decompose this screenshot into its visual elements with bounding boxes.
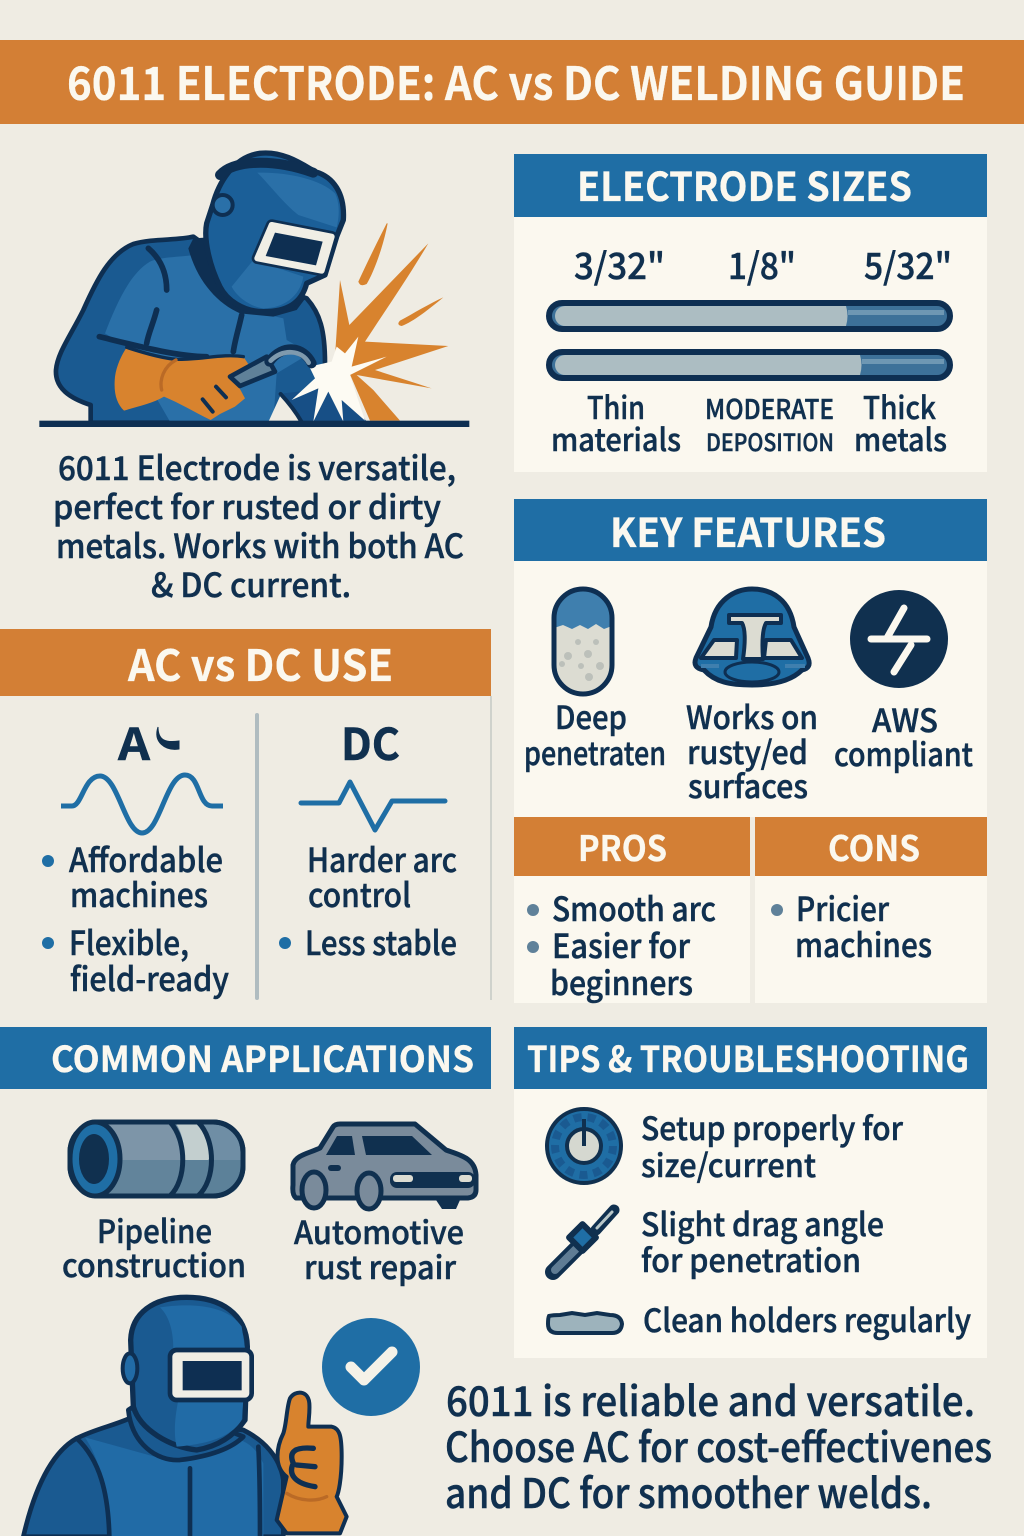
conclusion text: 6011 is reliable and versatile. xyxy=(446,1368,975,1428)
tips text: for penetration xyxy=(641,1236,861,1282)
icon: pipeline xyxy=(70,1122,243,1196)
panel: key features xyxy=(514,499,987,817)
heading: AC vs DC use xyxy=(0,629,491,696)
DC list: Less stable xyxy=(305,917,457,965)
intro text: & DC current. xyxy=(151,559,351,607)
cons list: Pricier xyxy=(796,883,889,931)
work surface xyxy=(39,421,469,427)
heading: cons: CONS xyxy=(828,821,920,872)
heading: pros xyxy=(514,817,750,876)
welder body xyxy=(56,237,325,423)
size uses: metals xyxy=(854,415,947,460)
heading: common applications: COMMON APPLICATIONS xyxy=(51,1031,474,1083)
AC list: Affordable xyxy=(69,834,223,882)
icon: deep penetration capsule xyxy=(554,589,612,694)
heading: pros: PROS xyxy=(578,821,667,872)
feature labels: rusty/ed xyxy=(687,728,808,774)
DC column: DC xyxy=(341,709,400,773)
thumbs up glove xyxy=(277,1393,347,1533)
tips text: Clean holders regularly xyxy=(643,1296,971,1342)
panel: pros xyxy=(514,817,750,1005)
size uses: Thin xyxy=(587,383,645,428)
feature labels: compliant xyxy=(834,730,973,776)
size uses: Thick xyxy=(863,383,936,428)
DC list xyxy=(279,834,457,965)
heading: key features xyxy=(514,499,987,561)
feature labels: Deep xyxy=(555,693,627,739)
icon: car xyxy=(293,1124,476,1209)
pros list: Smooth arc xyxy=(552,883,716,931)
size labels xyxy=(574,238,952,290)
glove xyxy=(115,347,250,420)
heading: electrode sizes: ELECTRODE SIZES xyxy=(577,155,912,213)
DC column xyxy=(279,709,457,965)
application labels: Automotive xyxy=(294,1208,464,1254)
electrode bar 2 xyxy=(549,352,950,378)
AC column: A xyxy=(117,709,151,773)
icon: AWS compliant bolt xyxy=(850,590,948,688)
icon: dial xyxy=(547,1109,621,1183)
lower body behind the flash xyxy=(283,387,367,422)
panel: electrode sizes xyxy=(514,154,987,472)
size labels: 1/8" xyxy=(728,238,796,290)
conclusion text xyxy=(445,1368,992,1520)
illustration: welder at work xyxy=(39,153,469,427)
DC list: control xyxy=(308,869,411,917)
size uses: materials xyxy=(551,415,681,460)
arc flash xyxy=(292,337,387,422)
size labels: 5/32" xyxy=(864,238,952,290)
torch xyxy=(230,357,275,386)
heading: AC vs DC use: AC vs DC USE xyxy=(127,632,393,694)
tips text xyxy=(641,1104,971,1342)
panel: common applications xyxy=(0,1027,491,1289)
conclusion text: and DC for smoother welds. xyxy=(445,1460,932,1520)
feature labels xyxy=(524,693,973,808)
cons list: machines xyxy=(795,919,932,967)
DC list: Harder arc xyxy=(307,834,457,882)
welding helmet xyxy=(206,153,343,312)
icon: check badge xyxy=(322,1318,420,1416)
DC waveform xyxy=(301,782,445,830)
feature labels: AWS xyxy=(872,696,938,742)
feature labels: penetraten xyxy=(524,729,666,775)
tips text: size/current xyxy=(641,1141,816,1187)
intro text xyxy=(53,442,464,607)
panel: cons xyxy=(755,817,987,1003)
tips text: Slight drag angle xyxy=(641,1200,884,1246)
heading: key features: KEY FEATURES xyxy=(610,501,886,559)
icon: rusty surfaces weld xyxy=(695,589,809,685)
AC list: machines xyxy=(70,869,208,917)
application labels: construction xyxy=(62,1241,246,1287)
visor xyxy=(170,1350,252,1400)
AC column xyxy=(42,709,229,1001)
AC list: Flexible, xyxy=(69,917,189,965)
helmet xyxy=(131,1297,247,1450)
feature labels: surfaces xyxy=(688,762,808,808)
AC list xyxy=(42,834,229,1001)
heading: tips and troubleshooting: TIPS & TROUBLESHOOTING xyxy=(527,1031,969,1083)
heading: electrode sizes xyxy=(514,154,987,217)
icon: electrode holder xyxy=(553,1210,614,1272)
AC waveform xyxy=(61,775,223,833)
feature labels: Works on xyxy=(686,693,818,739)
pros list: beginners xyxy=(550,957,693,1005)
size uses xyxy=(551,383,947,460)
size labels: 3/32" xyxy=(574,238,665,290)
heading: cons xyxy=(755,817,987,876)
application labels xyxy=(62,1207,464,1289)
intro text: 6011 Electrode is versatile, xyxy=(58,442,456,490)
electrode bar 1 xyxy=(549,303,950,329)
AC list: field-ready xyxy=(70,953,229,1001)
application labels: rust repair xyxy=(304,1243,457,1289)
size uses: DEPOSITION xyxy=(706,423,834,458)
tips text: Setup properly for xyxy=(641,1104,904,1150)
panel: tips and troubleshooting xyxy=(514,1027,987,1358)
cons list xyxy=(771,883,932,967)
panel: AC vs DC use xyxy=(0,629,492,1001)
sparks xyxy=(335,223,448,421)
helmet visor xyxy=(257,225,332,271)
pros list: Easier for xyxy=(552,920,690,968)
illustration: welder thumbs up xyxy=(23,1297,347,1536)
intro text: perfect for rusted or dirty xyxy=(53,481,441,529)
size uses: MODERATE xyxy=(705,388,834,427)
intro text: metals. Works with both AC xyxy=(56,520,464,568)
icon: clean holder bead xyxy=(548,1313,622,1333)
title banner: 6011 ELECTRODE: AC vs DC WELDING GUIDE xyxy=(67,48,965,114)
application labels: Pipeline xyxy=(97,1207,212,1253)
pros list xyxy=(527,883,716,1005)
welder torso xyxy=(23,1417,283,1536)
